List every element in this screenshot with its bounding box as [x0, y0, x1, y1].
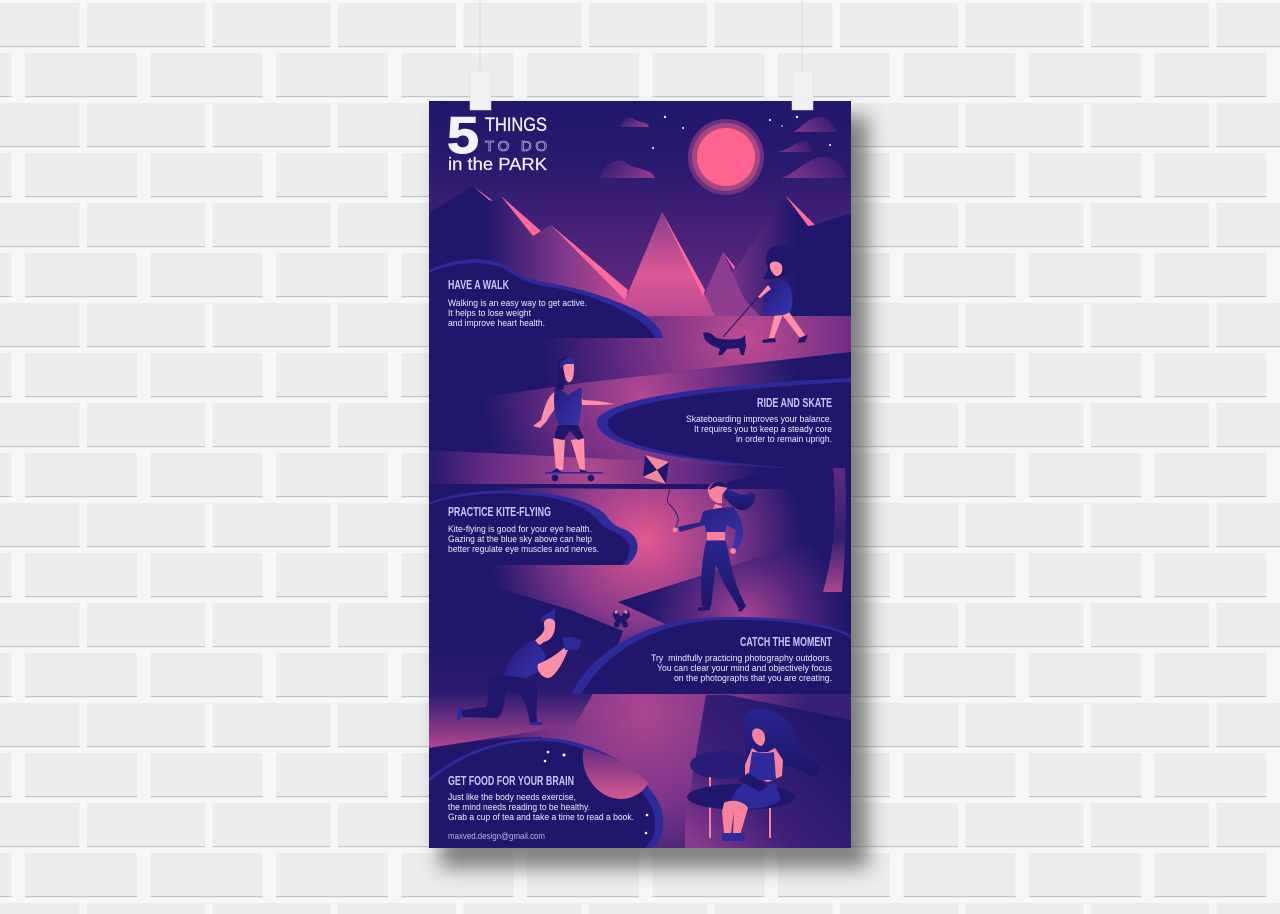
text: practice kite-flying: Kite-flying is good for your eye health.: [448, 524, 592, 535]
heading: have a walk: HAVE A WALK: [448, 277, 509, 292]
icon: dog: [703, 332, 746, 355]
panel: have a walk: [429, 259, 663, 338]
icon: cup: [720, 786, 729, 793]
text: ride and skate: in order to remain uprigh.: [736, 434, 832, 445]
panel: get food for your brain: [429, 737, 663, 848]
night sky: [429, 154, 851, 294]
text: have a walk: [448, 298, 587, 329]
heading: ride and skate: RIDE AND SKATE: [757, 395, 832, 410]
heading: get food for your brain: GET FOOD FOR YOUR BRAIN: [448, 773, 574, 788]
icon: book: [738, 773, 768, 792]
dog leash: [723, 297, 758, 337]
table: [690, 751, 748, 779]
icon: kite: [643, 455, 678, 530]
panel: catch the moment: [571, 617, 851, 694]
poster: [429, 101, 851, 848]
title: TO DO: [485, 138, 547, 155]
panel: ride and skate: [597, 378, 851, 468]
text: practice kite-flying: better regulate eye muscles and nerves.: [448, 544, 599, 555]
text: get food for your brain: Just like the body needs exercise,: [448, 792, 576, 803]
icon: setting sun: [583, 748, 648, 799]
figure: kite-flying girl: [672, 481, 755, 612]
photographer backdrop: [429, 585, 623, 748]
figure: skateboarder: [533, 357, 615, 481]
moon: [688, 119, 764, 195]
text: get food for your brain: the mind needs reading to be healthy.: [448, 802, 590, 813]
text: have a walk: and improve heart health.: [448, 318, 545, 329]
text: catch the moment: on the photographs that you are creating.: [674, 673, 832, 684]
text: practice kite-flying: [448, 524, 599, 555]
stars: [652, 116, 831, 149]
title: [448, 116, 547, 170]
stars: [544, 751, 648, 834]
reading backdrop: [685, 695, 851, 848]
text: ride and skate: Skateboarding improves your balance.: [686, 414, 832, 425]
text: get food for your brain: [448, 792, 634, 823]
text: catch the moment: You can clear your mind and objectively focus: [657, 663, 832, 674]
heading: practice kite-flying: PRACTICE KITE-FLYING: [448, 504, 551, 519]
poster shadow: [440, 116, 868, 868]
text: ride and skate: [686, 414, 832, 445]
figure: woman walking dog: [703, 245, 808, 355]
title: THINGS: [485, 115, 547, 136]
text: have a walk: Walking is an easy way to get active.: [448, 298, 587, 309]
figure: photographer: [457, 607, 582, 725]
panel: practice kite-flying: [429, 490, 638, 565]
text: get food for your brain: Grab a cup of tea and take a time to read a book.: [448, 812, 634, 823]
path zones: [429, 316, 851, 848]
heading: catch the moment: CATCH THE MOMENT: [740, 634, 832, 649]
title: in the PARK: [448, 154, 547, 174]
email: maxved.design@gmail.com: [448, 830, 545, 841]
hanging strings: [480, 0, 802, 72]
icon: skateboard: [545, 468, 603, 481]
clouds: [600, 117, 847, 178]
text: ride and skate: It requires you to keep a steady core: [694, 424, 832, 435]
text: catch the moment: [651, 653, 832, 684]
tree trunk: [823, 467, 846, 592]
text: practice kite-flying: Gazing at the blue sky above can help: [448, 534, 592, 545]
text: catch the moment: Try mindfully practicing photography outdoors.: [651, 653, 832, 664]
figure: woman reading: [687, 709, 820, 841]
icon: butterfly: [613, 610, 630, 627]
paper clips: [470, 71, 813, 110]
text: have a walk: It helps to lose weight: [448, 308, 531, 319]
mountains: [429, 186, 851, 320]
title: 5: [447, 107, 479, 165]
